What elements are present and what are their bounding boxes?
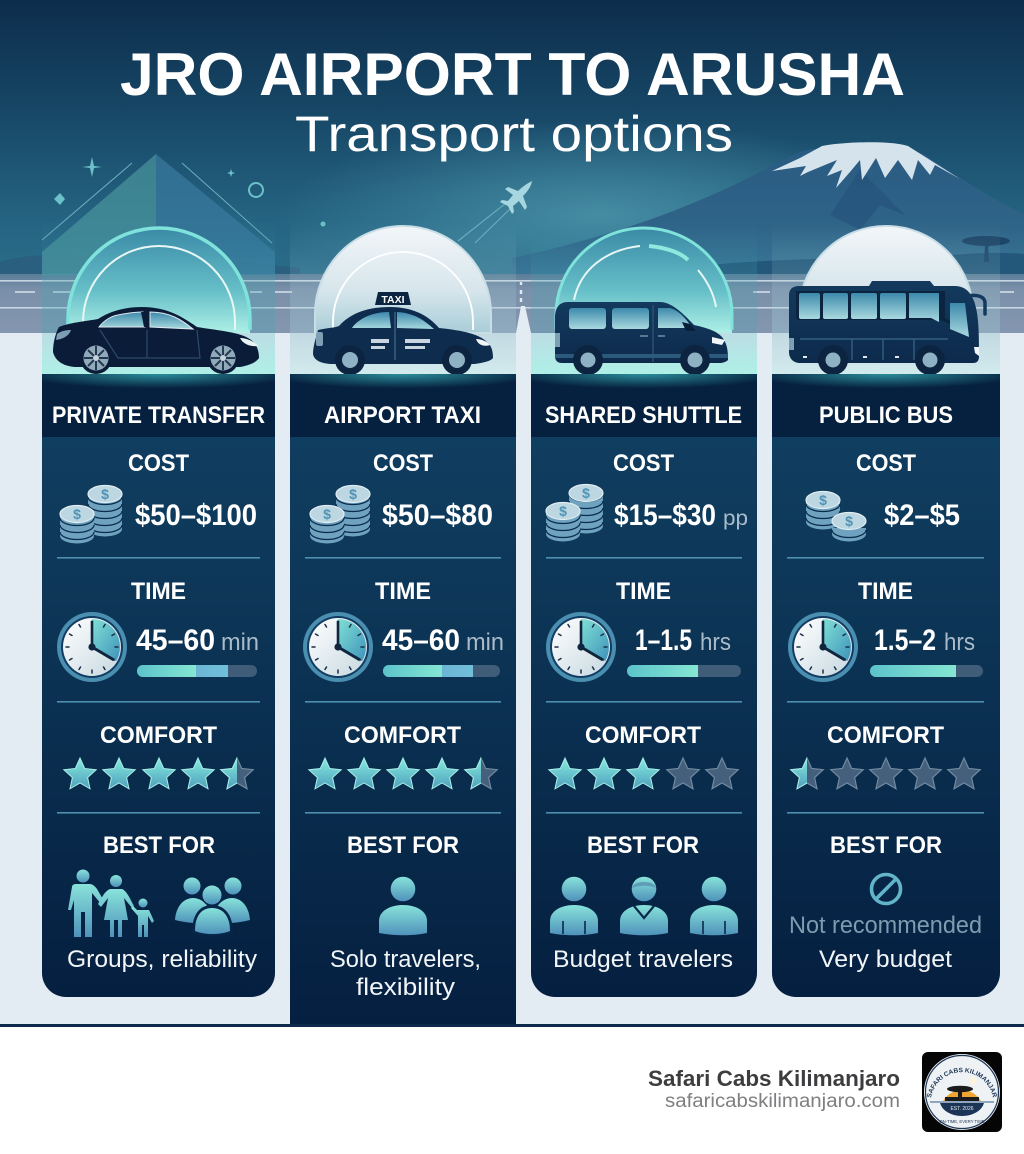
card header: PRIVATE TRANSFER <box>52 402 265 429</box>
cost row: $2–$5 <box>884 499 960 532</box>
central road <box>516 282 531 333</box>
best for <box>550 832 738 973</box>
title: JRO AIRPORT TO ARUSHA <box>120 41 905 108</box>
icon: three travelers <box>550 877 738 935</box>
time row <box>303 578 504 682</box>
time row: TIME <box>616 578 671 605</box>
best for <box>789 832 982 973</box>
icon: van <box>555 302 728 375</box>
time row <box>788 578 983 682</box>
panel: shared shuttle <box>531 222 757 997</box>
best for: BEST FOR <box>830 832 942 859</box>
comfort rating: COMFORT <box>344 722 461 749</box>
card header <box>290 374 516 437</box>
vehicle backdrop: white dome <box>772 222 1000 375</box>
progress bar <box>137 665 257 677</box>
cost row: $50–$100 <box>135 499 257 532</box>
card header: SHARED SHUTTLE <box>545 402 742 429</box>
icon: clock <box>57 612 127 682</box>
card body <box>772 437 1000 997</box>
time row: min <box>466 629 504 656</box>
comfort rating <box>791 722 980 789</box>
time row: TIME <box>375 578 431 605</box>
card header: PUBLIC BUS <box>819 402 953 429</box>
vehicle backdrop: teal dome <box>531 222 757 375</box>
time row: 45–60 <box>382 624 460 657</box>
cost row: COST <box>128 450 189 477</box>
stars: 4.5 of 5 <box>309 758 497 789</box>
progress bar <box>870 665 983 677</box>
best for: Very budget <box>819 946 952 973</box>
best for: BEST FOR <box>103 832 215 859</box>
cost row: COST <box>856 450 916 477</box>
icon: coins <box>60 486 122 544</box>
card body <box>531 437 757 997</box>
progress bar <box>627 665 741 677</box>
logo badge: EST. 2026 <box>950 1106 974 1112</box>
stars: 4.5 of 5 <box>64 758 253 789</box>
card header: AIRPORT TAXI <box>324 402 481 429</box>
time row: 1.5–2 <box>874 624 936 657</box>
card body <box>42 437 275 997</box>
card body <box>290 437 516 1024</box>
time row <box>57 578 259 682</box>
decorative sparkles <box>54 157 326 226</box>
icon: clock <box>546 612 616 682</box>
cost row <box>806 450 960 542</box>
comfort rating: COMFORT <box>585 722 701 749</box>
time row: 45–60 <box>136 624 215 657</box>
icon: solo traveler <box>379 877 427 935</box>
vehicle backdrop: white dome <box>290 222 516 375</box>
card header <box>42 374 275 437</box>
stars: 0.5 of 5 <box>791 758 980 789</box>
cost row <box>546 450 748 542</box>
icon: taxi <box>313 292 493 375</box>
logo badge: ON-TIME, EVERY TIME <box>939 1119 985 1124</box>
icon: coins <box>806 492 866 542</box>
comfort rating: COMFORT <box>100 722 217 749</box>
icon: family <box>68 870 154 937</box>
icon: taxi: TAXI <box>381 294 405 306</box>
hills <box>640 253 1024 280</box>
best for: Not recommended <box>789 912 982 939</box>
cost row: pp <box>723 507 748 530</box>
icon: coins <box>546 484 603 542</box>
best for <box>330 832 481 1001</box>
card header <box>772 374 1000 437</box>
cost row <box>60 450 257 544</box>
panel: airport taxi <box>290 222 516 1024</box>
mountain: Kilimanjaro <box>0 142 1024 280</box>
logo badge: SAFARI CABS KILIMANJARO <box>927 1068 997 1098</box>
icon: not recommended <box>872 874 900 904</box>
icon: clock <box>303 612 373 682</box>
comfort rating <box>64 722 253 789</box>
subtitle: Transport options <box>295 106 733 162</box>
progress bar <box>383 665 500 677</box>
vehicle backdrop: teal dome <box>42 222 275 375</box>
best for: Budget travelers <box>553 946 733 973</box>
brand name: Safari Cabs Kilimanjaro <box>648 1066 900 1091</box>
time row: TIME <box>858 578 913 605</box>
best for: flexibility <box>356 974 455 1001</box>
time row: 1–1.5 <box>635 624 692 657</box>
icon: airplane <box>458 181 532 243</box>
comfort rating <box>309 722 497 789</box>
cost row <box>310 450 493 544</box>
best for <box>67 832 257 973</box>
time row: TIME <box>131 578 186 605</box>
best for: Groups, reliability <box>67 946 257 973</box>
icon: coins <box>310 486 370 544</box>
icon: acacia tree <box>962 236 1010 262</box>
best for: Solo travelers, <box>330 946 481 973</box>
comfort rating: COMFORT <box>827 722 944 749</box>
best for: BEST FOR <box>347 832 459 859</box>
pyramid building <box>42 154 275 275</box>
panel: private transfer <box>42 222 275 997</box>
time row <box>546 578 741 682</box>
pale lower background <box>0 333 1024 1024</box>
road band <box>0 274 1024 333</box>
time row: hrs <box>700 629 731 656</box>
icon: clock <box>788 612 858 682</box>
cost row: $50–$80 <box>382 499 493 532</box>
card header <box>531 374 757 437</box>
best for: BEST FOR <box>587 832 699 859</box>
comfort rating <box>549 722 738 789</box>
stars: 3 of 5 <box>549 758 738 789</box>
icon: group <box>175 878 250 936</box>
time row: hrs <box>944 629 975 656</box>
cost row: COST <box>613 450 674 477</box>
time row: min <box>221 629 259 656</box>
panel: public bus <box>772 222 1000 997</box>
cost row: COST <box>373 450 433 477</box>
website: safaricabskilimanjaro.com <box>665 1091 900 1112</box>
icon: bus <box>789 281 985 375</box>
cost row: $15–$30 <box>614 499 716 532</box>
icon: black sedan <box>53 307 259 374</box>
